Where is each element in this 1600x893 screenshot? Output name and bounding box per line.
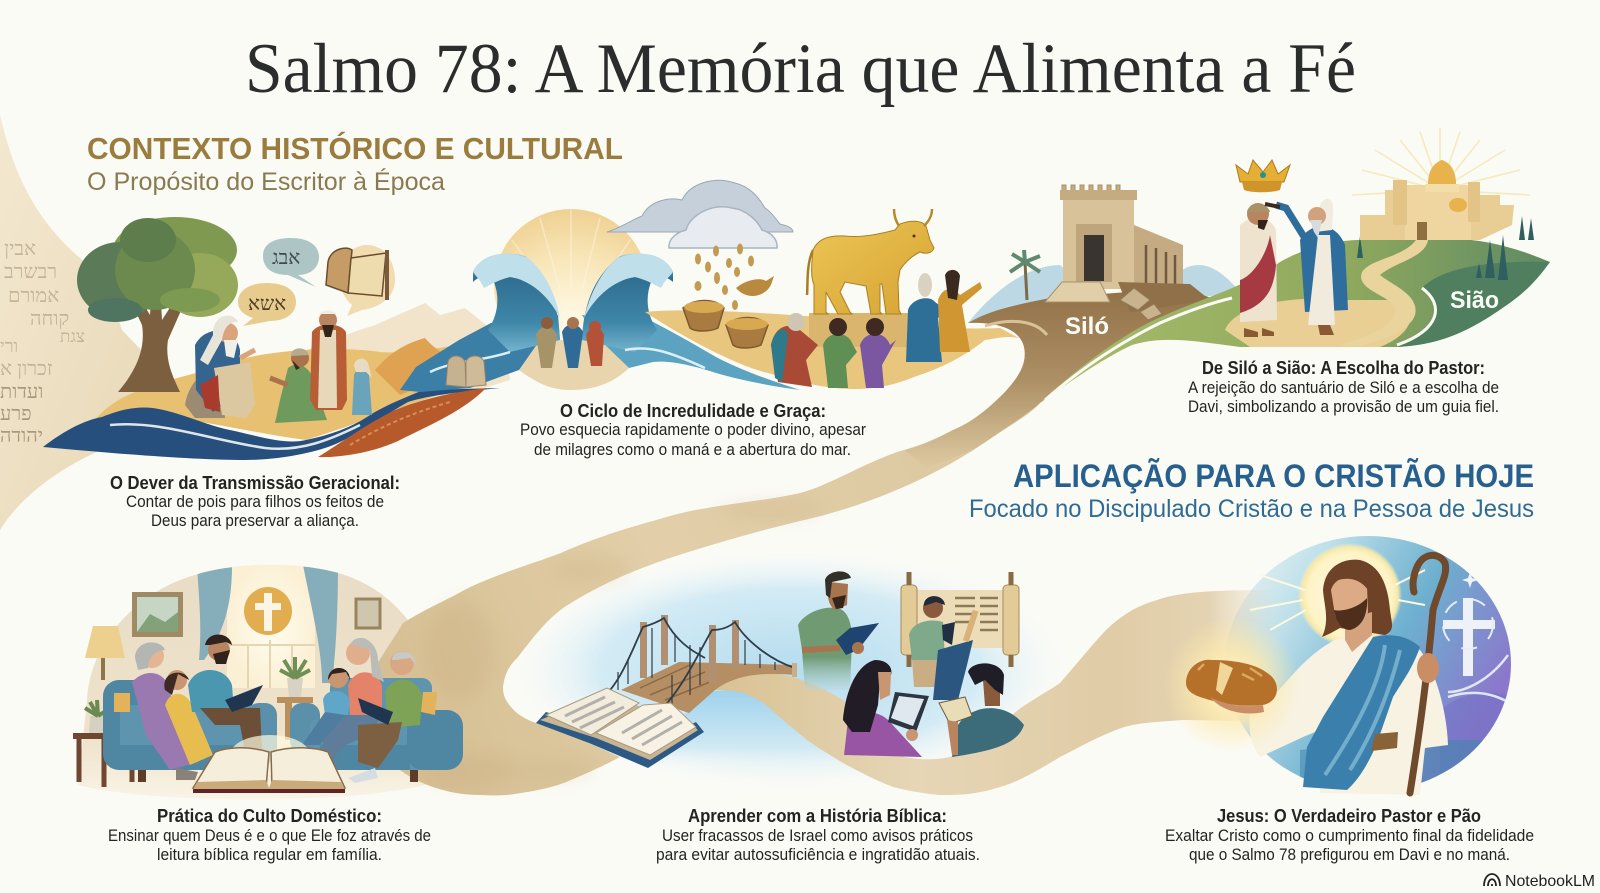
scroll [901, 572, 1019, 667]
seated elder [185, 316, 255, 418]
Jesus background circle [1228, 536, 1511, 783]
right wave foam [584, 254, 673, 318]
text block: ciclo [520, 401, 866, 459]
blue mantle [1303, 635, 1420, 790]
section heading: contexto: CONTEXTO HISTÓRICO E CULTURAL [87, 130, 623, 166]
parchment scroll with Hebrew text: אמורם [8, 285, 59, 307]
illustration: sea crossing [400, 209, 800, 392]
Sião label: Sião [1450, 287, 1499, 314]
speech bubbles: אשא [248, 293, 286, 315]
parchment scroll with Hebrew text: קוחה [30, 308, 69, 330]
painting [132, 592, 183, 637]
spoon [736, 276, 774, 296]
girl [164, 670, 213, 765]
text block: transmissão [110, 473, 400, 530]
open book [536, 688, 704, 768]
clouds [607, 180, 793, 248]
stone tablets [446, 356, 486, 387]
grandmother [132, 642, 198, 780]
green ribbon [1040, 239, 1550, 403]
open Bible [193, 735, 345, 793]
logo: NotebookLM: NotebookLM [1505, 873, 1595, 890]
text block: culto doméstico: Prática do Culto Doméstico: [157, 806, 382, 826]
three walking figures [536, 317, 604, 368]
illustration: family worship [73, 587, 463, 793]
David figure [1240, 203, 1277, 337]
parchment scroll with Hebrew text: רבשרב [4, 261, 57, 283]
text block: transmissão: Deus para preservar a aliança. [151, 511, 359, 530]
standing man [310, 310, 347, 410]
parchment scroll with Hebrew text: ורי [0, 336, 18, 356]
baskets [683, 300, 768, 348]
illustration: learning from history [536, 571, 1024, 768]
text block: Siló a Sião: De Siló a Sião: A Escolha do Pastor: [1202, 358, 1485, 378]
road mottled texture [420, 501, 825, 786]
text block: Jesus: que o Salmo 78 prefigurou em Davi e no maná. [1189, 845, 1510, 864]
text block: ciclo: O Ciclo de Incredulidade e Graça: [560, 401, 826, 421]
child [352, 359, 372, 415]
lamp [85, 626, 125, 680]
robe [1249, 636, 1448, 795]
man writing on scroll [909, 596, 978, 700]
halo [1298, 543, 1402, 647]
grandfather [348, 651, 422, 783]
illustration: generational transmission [43, 217, 510, 460]
text block: Siló a Sião: A rejeição do santuário de Siló e a escolha de [1188, 378, 1499, 397]
dark green lower hill [1397, 262, 1550, 347]
parchment scroll with Hebrew text: אבין [4, 238, 36, 260]
blue water under bridge [640, 690, 860, 770]
section heading: aplicação: Focado no Discipulado Cristão e na Pessoa de Jesus [969, 495, 1534, 523]
sash [1371, 732, 1398, 751]
cushions [114, 692, 437, 715]
small picture [356, 599, 380, 628]
parchment scroll with Hebrew text: צגת [60, 327, 85, 346]
sun disc [494, 209, 648, 363]
text block: Jesus [1165, 806, 1534, 864]
text block: culto doméstico [108, 806, 431, 864]
section heading: contexto [87, 130, 623, 196]
parchment scroll with Hebrew text: זכרון א [0, 358, 52, 380]
text block: culto doméstico: Ensinar quem Deus é e o que Ele foz através de [108, 826, 431, 845]
left wave [473, 254, 560, 352]
suspension bridge [600, 615, 797, 715]
sand foreground [1225, 299, 1410, 347]
illustration: Jesus [1164, 543, 1448, 795]
text block: transmissão: Contar de pois para filhos os feitos de [126, 492, 384, 511]
illustration: Siló [905, 185, 1240, 468]
man reading [798, 571, 879, 690]
tablet and scroll icon [326, 248, 389, 300]
foam streaks [430, 348, 705, 372]
text block: história bíblica: User fracassos de Israel como avisos práticos [662, 826, 973, 845]
hill highlight [985, 321, 1047, 335]
center table and plant [277, 657, 313, 740]
cross [1443, 598, 1495, 676]
text block: Jesus: Jesus: O Verdadeiro Pastor e Pão [1217, 806, 1481, 826]
cross medallion [244, 587, 292, 635]
kneeling man [270, 348, 327, 423]
golden city [1352, 128, 1530, 240]
right sea [582, 315, 800, 390]
hair top [1325, 561, 1382, 608]
speech bubbles [238, 238, 395, 326]
road between waves [519, 340, 629, 390]
manna drops [694, 244, 754, 310]
Samuel figure [1265, 199, 1348, 335]
family room backdrop [78, 565, 440, 799]
cypress trees [1357, 216, 1534, 280]
right sofa [290, 678, 463, 782]
sand ground [95, 340, 505, 440]
icon: crown [1236, 160, 1290, 192]
blue hills [968, 265, 1100, 323]
text block: história bíblica: para evitar autossuficiência e ingratidão atuais. [656, 845, 980, 864]
Siló label: Siló [1065, 313, 1109, 340]
text block: ciclo: de milagres como o maná e a abertura do mar. [534, 440, 851, 459]
title: Salmo 78: A Memória que Alimenta a Fé [245, 30, 1356, 108]
speech bubbles: אבג [272, 247, 300, 269]
illustration: manna and golden calf [607, 180, 1019, 389]
hand on staff [1417, 653, 1439, 683]
sand ground [645, 310, 1019, 389]
section heading: aplicação: APLICAÇÃO PARA O CRISTÃO HOJE [1013, 458, 1534, 494]
shepherd staff [1410, 555, 1446, 793]
mother and child [302, 638, 384, 762]
star [1462, 572, 1478, 588]
hair back [1322, 560, 1392, 637]
back dunes and mountains [270, 303, 510, 420]
left wave foam [473, 254, 560, 318]
white stripe [1045, 288, 1436, 400]
winding road: bridge to Jesus [714, 590, 1280, 795]
left sofa [103, 680, 277, 782]
face and neck [1345, 612, 1372, 652]
side table [73, 700, 137, 787]
bread glow [1164, 617, 1300, 753]
text block: história bíblica [656, 806, 980, 864]
bread loaf [1186, 660, 1277, 706]
worshippers [771, 270, 982, 388]
text block: Siló a Sião [1188, 358, 1499, 416]
father [188, 634, 263, 752]
text block: história bíblica: Aprender com a História Bíblica: [688, 806, 947, 826]
text block: Jesus: Exaltar Cristo como o cumprimento final da fidelidade [1165, 826, 1534, 845]
parchment scroll with Hebrew text: ועדות [0, 381, 43, 403]
parchment scroll with Hebrew text: פרע [0, 403, 32, 425]
hand with bread [1210, 697, 1264, 713]
river highlight [110, 424, 360, 449]
sun rays [512, 209, 630, 300]
left sea [400, 315, 560, 392]
pedestal [809, 313, 908, 347]
woman with tablet [843, 660, 929, 757]
section heading: contexto: O Propósito do Escritor à Época [87, 167, 445, 196]
window and curtains [197, 563, 338, 688]
text block: Siló a Sião: Davi, simbolizando a provisão de um guia fiel. [1188, 397, 1499, 416]
illustration: Sião hill [1040, 128, 1550, 403]
beard [1334, 598, 1367, 630]
brown hill [905, 288, 1218, 468]
blue river [43, 388, 500, 460]
text block: culto doméstico: leitura bíblica regular em família. [157, 845, 382, 864]
halo rays [1250, 570, 1425, 630]
winding path to city [1340, 240, 1428, 347]
palm [1010, 250, 1040, 300]
text block: transmissão: O Dever da Transmissão Geracional: [110, 473, 400, 493]
orange dune [375, 338, 470, 395]
temple [1045, 185, 1210, 320]
text block: ciclo: Povo esquecia rapidamente o poder divino, apesar [520, 420, 866, 439]
golden calf [807, 209, 934, 314]
parchment scroll with Hebrew text: יהודה [0, 425, 43, 447]
right wave [582, 254, 673, 352]
olive tree [77, 217, 238, 392]
man with book [939, 663, 1024, 757]
pale blue glow behind learning scene [500, 545, 1080, 795]
section heading: aplicação [969, 458, 1534, 523]
parchment scroll with Hebrew text [0, 115, 175, 530]
orange patterned band [318, 388, 486, 457]
winding road: Siló to family [378, 330, 1100, 795]
